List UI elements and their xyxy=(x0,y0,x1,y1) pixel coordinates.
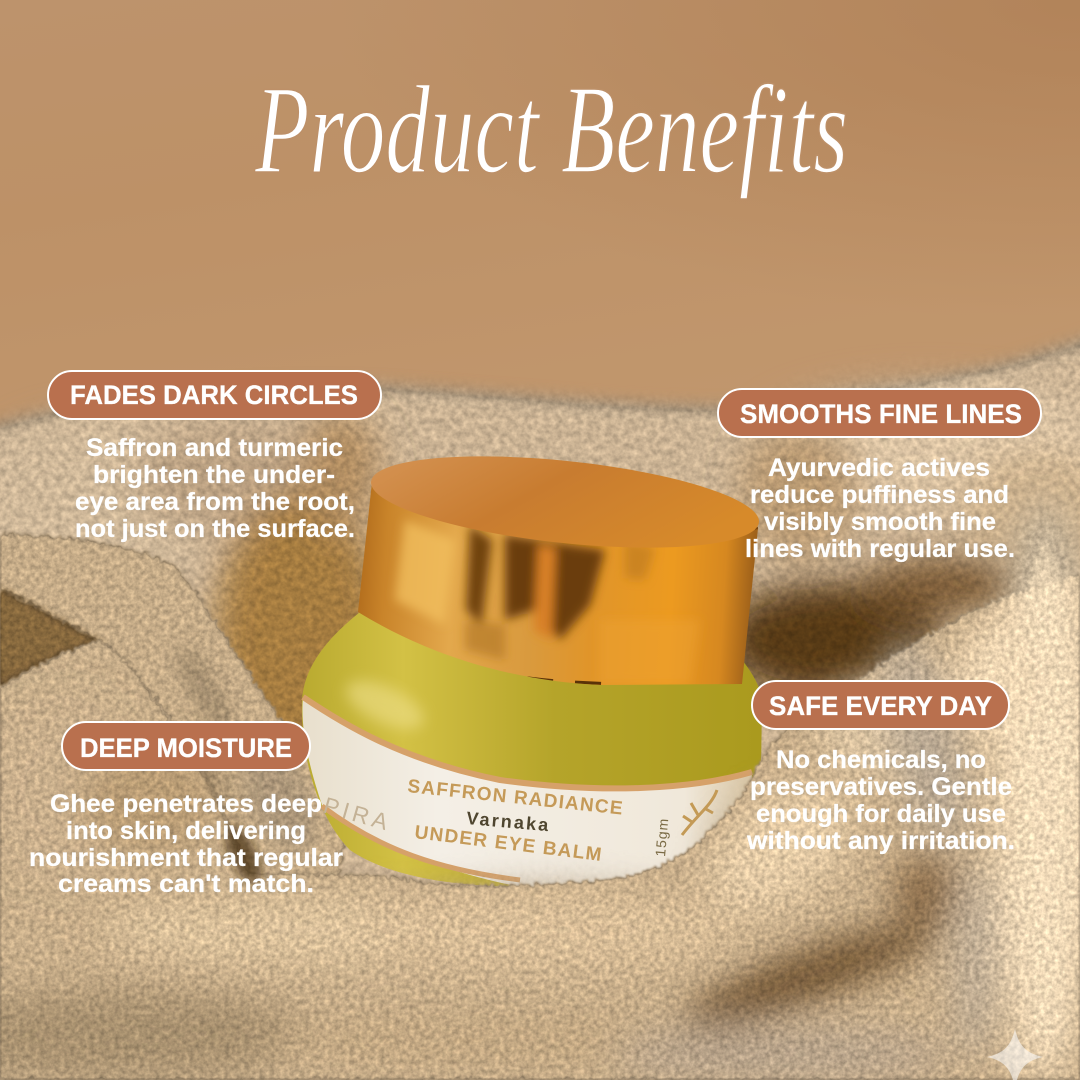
body text: creams can't match. xyxy=(58,870,314,898)
pill xyxy=(718,389,1041,437)
body text: not just on the surface. xyxy=(75,515,355,543)
jar glass xyxy=(302,612,762,887)
body text: Ghee penetrates deep xyxy=(50,790,322,818)
foreground cloth xyxy=(0,500,1080,1080)
body text: No chemicals, no xyxy=(776,746,986,774)
body text: Saffron and turmeric xyxy=(86,434,343,462)
pill: FADES DARK CIRCLES xyxy=(70,380,358,410)
jar cap top xyxy=(367,441,763,563)
body text xyxy=(75,434,355,543)
callout: fades dark circles xyxy=(48,371,381,543)
label text: brand: PIRA xyxy=(321,792,395,836)
label text: weight: 15gm xyxy=(652,817,671,857)
body text xyxy=(745,454,1015,563)
product jar xyxy=(302,441,763,890)
dark pocket by jar xyxy=(218,821,268,889)
body text: eye area from the root, xyxy=(75,488,355,516)
callout: smooths fine lines xyxy=(718,389,1041,563)
pill xyxy=(752,681,1009,729)
body text xyxy=(29,790,343,898)
body text: brighten the under- xyxy=(93,461,335,489)
body text: Ayurvedic actives xyxy=(768,454,990,482)
pill xyxy=(62,722,310,770)
title: Product Benefits xyxy=(254,61,848,200)
callout: deep moisture xyxy=(29,722,343,898)
pill xyxy=(48,371,381,419)
icon: sparkle xyxy=(987,1029,1043,1080)
body text xyxy=(746,746,1015,855)
pill: SAFE EVERY DAY xyxy=(769,691,992,721)
label text: under eye balm: UNDER EYE BALM xyxy=(413,822,603,866)
body text: enough for daily use xyxy=(756,800,1006,828)
fold: upper left band of cloth xyxy=(0,534,345,880)
shadow pocket xyxy=(0,570,104,710)
body text: into skin, delivering xyxy=(66,817,306,845)
body text: lines with regular use. xyxy=(745,535,1015,563)
label text: saffron radiance: SAFFRON RADIANCE xyxy=(406,776,623,820)
pill: DEEP MOISTURE xyxy=(80,733,292,763)
callout: safe every day xyxy=(746,681,1015,855)
body text: visibly smooth fine xyxy=(764,508,996,536)
jar cap side xyxy=(358,482,758,685)
body text: without any irritation. xyxy=(746,827,1015,855)
jar label xyxy=(302,697,752,890)
body text: nourishment that regular xyxy=(29,844,343,872)
label text: varnaka: Varnaka xyxy=(466,808,550,835)
photo background: back cloth xyxy=(0,310,1080,1080)
body text: reduce puffiness and xyxy=(750,481,1009,509)
label sprig xyxy=(682,790,717,835)
pill: SMOOTHS FINE LINES xyxy=(740,399,1022,429)
body text: preservatives. Gentle xyxy=(750,773,1012,801)
